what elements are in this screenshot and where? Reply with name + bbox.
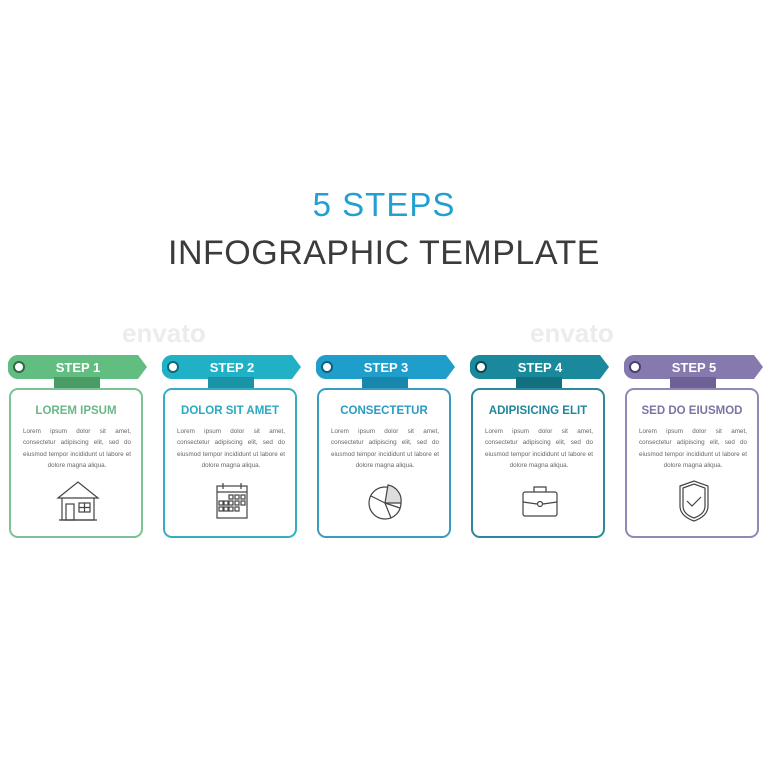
panel: step 1 bbox=[8, 355, 147, 538]
card: step 5: SED DO EIUSMOD bbox=[642, 405, 742, 417]
title: 5 STEPS bbox=[313, 186, 455, 223]
tab: step 3 bbox=[316, 355, 455, 379]
icon: briefcase bbox=[522, 486, 558, 517]
tab: step 4: STEP 4 bbox=[518, 360, 563, 375]
panel: step 3 bbox=[316, 355, 455, 538]
card: step 2: Lorem ipsum dolor sit amet, consectetur adipiscing elit, sed do eiusmod tempor incididunt ut labore et dolore magna aliqua. bbox=[177, 428, 285, 469]
tab: step 2 bbox=[162, 355, 301, 379]
tab: step 5: STEP 5 bbox=[672, 360, 716, 375]
card: step 3: Lorem ipsum dolor sit amet, consectetur adipiscing elit, sed do eiusmod tempor incididunt ut labore et dolore magna aliqua. bbox=[331, 428, 439, 469]
card: step 4 bbox=[471, 388, 605, 538]
icon: calendar bbox=[216, 483, 248, 519]
card: step 5 bbox=[625, 388, 759, 538]
tab: step 2: STEP 2 bbox=[210, 360, 254, 375]
card: step 4: ADIPISICING ELIT bbox=[489, 405, 587, 417]
card: step 5: Lorem ipsum dolor sit amet, consectetur adipiscing elit, sed do eiusmod tempor incididunt ut labore et dolore magna aliqua. bbox=[639, 428, 747, 469]
card: step 3 bbox=[317, 388, 451, 538]
watermark right: envato bbox=[530, 318, 614, 348]
tab: step 1: STEP 1 bbox=[56, 360, 100, 375]
tab: step 1 bbox=[8, 355, 147, 379]
icon: house bbox=[56, 481, 100, 521]
icon: shield check bbox=[679, 480, 709, 522]
panel: step 5 bbox=[624, 355, 763, 538]
card: step 1: LOREM IPSUM bbox=[35, 405, 117, 417]
panel: step 4 bbox=[470, 355, 609, 538]
tab: step 4 bbox=[470, 355, 609, 379]
tab: step 3: STEP 3 bbox=[364, 360, 408, 375]
card: step 2: DOLOR SIT AMET bbox=[181, 405, 279, 417]
card: step 2 bbox=[163, 388, 297, 538]
tab: step 5 bbox=[624, 355, 763, 379]
card: step 1: Lorem ipsum dolor sit amet, consectetur adipiscing elit, sed do eiusmod tempor incididunt ut labore et dolore magna aliqua. bbox=[23, 428, 131, 469]
panel: step 2 bbox=[162, 355, 301, 538]
subtitle: INFOGRAPHIC TEMPLATE bbox=[168, 234, 600, 272]
card: step 4: Lorem ipsum dolor sit amet, consectetur adipiscing elit, sed do eiusmod tempor incididunt ut labore et dolore magna aliqua. bbox=[485, 428, 593, 469]
card: step 3: CONSECTETUR bbox=[340, 405, 428, 417]
card: step 1 bbox=[9, 388, 143, 538]
icon: pie chart bbox=[368, 484, 402, 520]
watermark left: envato bbox=[122, 318, 206, 348]
